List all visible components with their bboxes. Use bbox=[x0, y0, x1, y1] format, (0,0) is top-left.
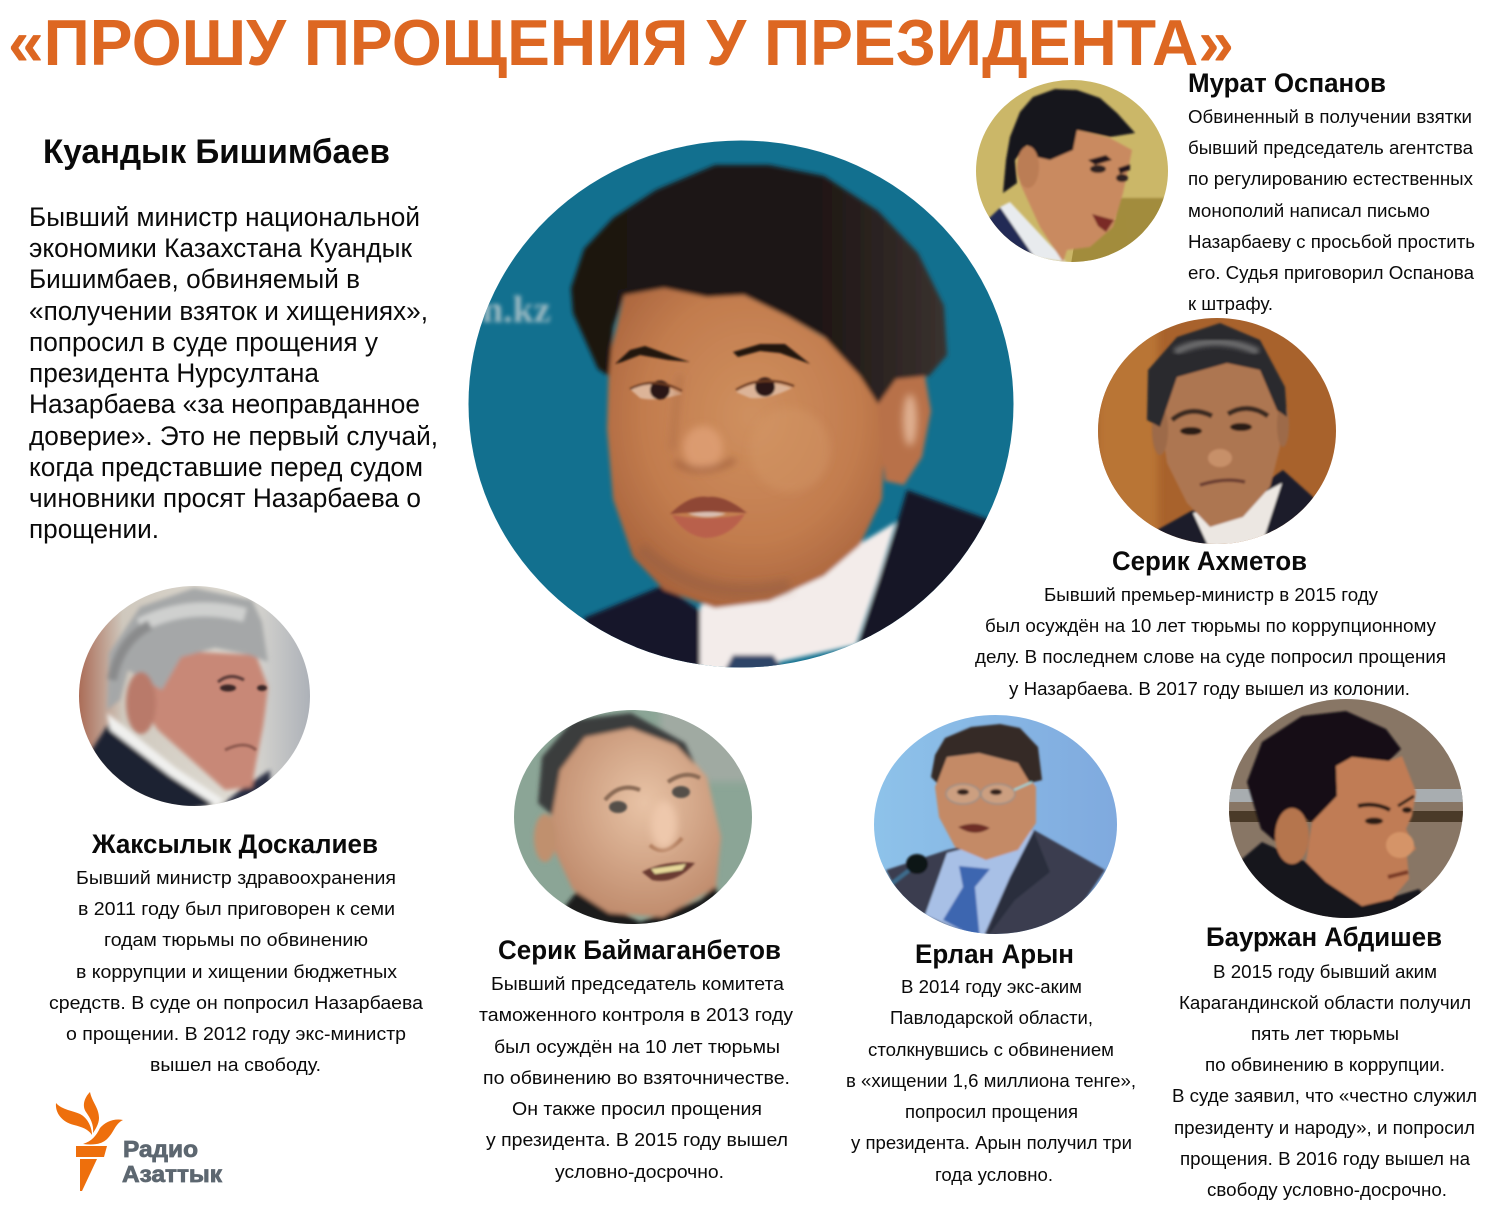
text block: В 2014 году экс-аким bbox=[901, 977, 1082, 997]
text block: таможенного контроля в 2013 году bbox=[479, 1005, 793, 1025]
portrait: Серик Ахметов bbox=[1098, 318, 1336, 544]
text block: года условно. bbox=[935, 1165, 1053, 1185]
text block: в «хищении 1,6 миллиона тенге», bbox=[846, 1071, 1136, 1091]
panel: Бауржан Абдишев bbox=[1172, 692, 1477, 1200]
text block: Обвиненный в получении взятки bbox=[1188, 107, 1472, 127]
title: «ПРОШУ ПРОЩЕНИЯ У ПРЕЗИДЕНТА» bbox=[8, 6, 1234, 79]
text block: intro paragraph: «получении взяток и хищениях», bbox=[29, 296, 428, 326]
text block: бывший председатель агентства bbox=[1188, 138, 1474, 158]
text block: intro paragraph: Назарбаева «за неоправданное bbox=[29, 389, 420, 419]
text block: intro paragraph: доверие». Это не первый случай, bbox=[29, 421, 438, 451]
text block: в коррупции и хищении бюджетных bbox=[76, 962, 397, 982]
text block: столкнувшись с обвинением bbox=[868, 1040, 1114, 1060]
text block: по обвинению в коррупции. bbox=[1205, 1055, 1445, 1075]
text block bbox=[846, 977, 1136, 1185]
text block: был осуждён на 10 лет тюрьмы bbox=[494, 1037, 780, 1057]
text block: intro paragraph bbox=[29, 202, 438, 544]
text block: Назарбаеву с просьбой простить bbox=[1188, 232, 1475, 252]
text block bbox=[49, 868, 424, 1075]
text block: прощения. В 2016 году вышел на bbox=[1180, 1149, 1471, 1169]
name: Ерлан Арын bbox=[915, 939, 1074, 969]
text block: попросил прощения bbox=[905, 1102, 1078, 1122]
text block: В суде заявил, что «честно служил bbox=[1172, 1086, 1477, 1106]
text block: Павлодарской области, bbox=[890, 1008, 1093, 1028]
panel: Ерлан Арын bbox=[846, 708, 1136, 1185]
text block bbox=[1172, 962, 1477, 1200]
portrait: Бауржан Абдишев bbox=[1229, 699, 1463, 918]
text block: В 2015 году бывший аким bbox=[1213, 962, 1437, 982]
portrait: Ерлан Арын bbox=[874, 715, 1117, 934]
panel: Серик Баймаганбетов bbox=[479, 702, 793, 1182]
panel: Жаксылык Доскалиев bbox=[49, 580, 424, 1075]
text block: Бывший премьер-министр в 2015 году bbox=[1044, 585, 1378, 605]
panel: Куандык Бишимбаев intro bbox=[29, 133, 438, 544]
text block: intro paragraph: прощении. bbox=[29, 514, 159, 544]
name: Серик Баймаганбетов bbox=[498, 935, 781, 965]
text block: intro paragraph: Бишимбаев, обвиняемый в bbox=[29, 264, 360, 294]
portrait: Куандык Бишимбаев: n.kz bbox=[482, 289, 551, 331]
logo text bbox=[122, 1136, 223, 1187]
name: Мурат Оспанов bbox=[1188, 68, 1386, 98]
text block: делу. В последнем слове на суде попросил прощения bbox=[975, 647, 1446, 667]
text block: президенту и народу», и попросил bbox=[1174, 1118, 1475, 1138]
portrait: Жаксылык Доскалиев bbox=[75, 580, 315, 815]
text block: intro paragraph: экономики Казахстана Куандык bbox=[29, 233, 412, 263]
ear bbox=[534, 814, 556, 862]
heading: Куандык Бишимбаев: Куандык Бишимбаев bbox=[43, 133, 390, 171]
text block: Бывший председатель комитета bbox=[491, 974, 785, 994]
portrait: Куандык Бишимбаев bbox=[460, 130, 1020, 680]
text block: intro paragraph: когда представшие перед судом bbox=[29, 452, 423, 482]
ear bbox=[1275, 808, 1309, 864]
text block: в 2011 году был приговорен к семи bbox=[78, 899, 395, 919]
name: Серик Ахметов bbox=[1112, 546, 1307, 576]
text block: у президента. В 2015 году вышел bbox=[486, 1130, 788, 1150]
icon: torch bbox=[56, 1092, 123, 1191]
text block: по обвинению во взяточничестве. bbox=[483, 1068, 790, 1088]
portrait: Мурат Оспанов bbox=[976, 80, 1168, 262]
name: Жаксылык Доскалиев bbox=[91, 829, 378, 859]
text block: был осуждён на 10 лет тюрьмы по коррупционному bbox=[985, 616, 1436, 636]
ear bbox=[1017, 146, 1039, 188]
logo text: Азаттык bbox=[122, 1161, 223, 1187]
text block: к штрафу. bbox=[1188, 294, 1273, 314]
text block: intro paragraph: чиновники просят Назарбаева о bbox=[29, 483, 421, 513]
text block: монополий написал письмо bbox=[1188, 201, 1430, 221]
text block bbox=[479, 974, 793, 1182]
text block: годам тюрьмы по обвинению bbox=[104, 930, 368, 950]
panel: Мурат Оспанов bbox=[970, 68, 1475, 314]
text block: Карагандинской области получил bbox=[1179, 993, 1471, 1013]
panel: Серик Ахметов bbox=[975, 310, 1446, 699]
text block: intro paragraph: президента Нурсултана bbox=[29, 358, 319, 388]
text block: intro paragraph: попросил в суде прощения у bbox=[29, 327, 379, 357]
logo text: Радио bbox=[123, 1136, 198, 1162]
portrait: Серик Баймаганбетов bbox=[514, 710, 752, 924]
text block: средств. В суде он попросил Назарбаева bbox=[49, 993, 424, 1013]
text block: его. Судья приговорил Оспанова bbox=[1188, 263, 1475, 283]
text block: условно-досрочно. bbox=[555, 1162, 724, 1182]
text block: пять лет тюрьмы bbox=[1251, 1024, 1399, 1044]
text block: о прощении. В 2012 году экс-министр bbox=[66, 1024, 406, 1044]
text block bbox=[975, 585, 1446, 699]
text block: по регулированию естественных bbox=[1188, 169, 1473, 189]
text block: у Назарбаева. В 2017 году вышел из колонии. bbox=[1009, 679, 1410, 699]
name: Бауржан Абдишев bbox=[1206, 922, 1442, 952]
text block bbox=[1188, 107, 1475, 314]
text block: Бывший министр здравоохранения bbox=[76, 868, 396, 888]
ear bbox=[126, 672, 156, 734]
text block: у президента. Арын получил три bbox=[851, 1133, 1132, 1153]
text block: свободу условно-досрочно. bbox=[1207, 1180, 1447, 1200]
text block: intro paragraph: Бывший министр национальной bbox=[29, 202, 420, 232]
text block: вышел на свободу. bbox=[150, 1055, 321, 1075]
text block: Он также просил прощения bbox=[512, 1099, 762, 1119]
logo: Радио Азаттык bbox=[56, 1092, 223, 1191]
